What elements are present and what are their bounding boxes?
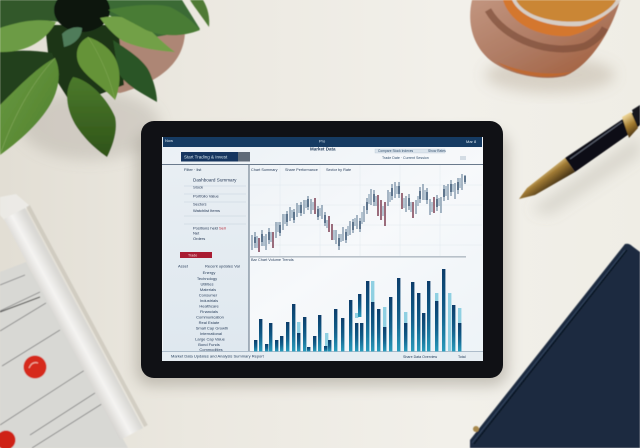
stock list: Technology — [197, 276, 217, 281]
panel: sidebar — [163, 165, 250, 352]
stock list: Asset — [178, 264, 189, 268]
panel: sidebar: Orders — [193, 236, 205, 241]
red button — [180, 252, 212, 258]
screen — [162, 137, 483, 361]
status bar: Total — [458, 355, 466, 359]
divider — [250, 256, 466, 258]
top navigation bar: Pro — [319, 138, 326, 144]
stock list: Energy — [203, 270, 215, 275]
candle bodies — [255, 176, 465, 246]
header title and controls: Compare Stock Indexes — [378, 149, 414, 153]
bar chart — [251, 258, 461, 352]
stock list: Healthcare — [199, 304, 219, 308]
panel: sidebar: Net — [193, 230, 200, 236]
red button: Trade — [188, 254, 197, 258]
stock list: Real Estate — [199, 320, 220, 325]
top navigation bar: Now — [165, 138, 173, 143]
stock list: Utilities — [201, 282, 213, 286]
red pin lower — [0, 430, 16, 448]
panel: sidebar: Filter · list — [184, 167, 202, 172]
icon: navy notebook — [470, 244, 640, 448]
bar chart: Bar Chart Volume Trends — [251, 258, 294, 262]
icon: coffee jar — [470, 0, 621, 93]
marker pen — [4, 208, 143, 440]
tablet — [136, 121, 508, 386]
panel: sidebar: Positions held Sell — [193, 226, 226, 230]
dark bars — [254, 269, 461, 352]
header search box — [181, 152, 250, 162]
line chart: candlesticks: Sector by Rate — [326, 168, 351, 172]
stock list: Val — [234, 264, 240, 268]
panel: sidebar: Portfolio Value — [193, 194, 219, 198]
stock list: Commodities — [199, 347, 223, 352]
line chart: candlesticks: Chart Summary — [251, 168, 278, 172]
stock list: Financials — [200, 309, 218, 314]
header title and controls: Market Data — [310, 146, 336, 152]
panel: sidebar: Stock — [193, 184, 203, 190]
line chart: candlesticks — [250, 165, 482, 256]
stock list: Small Cap Growth — [196, 326, 228, 330]
candle wicks — [252, 174, 465, 250]
red pin — [24, 356, 46, 378]
stock list: Large Cap Value — [195, 336, 226, 342]
icon: fountain pen — [519, 105, 640, 215]
intermediate wicks — [257, 178, 460, 248]
stock list: Materials — [200, 287, 216, 292]
status bar — [162, 351, 483, 361]
stock list: Industrials — [200, 298, 218, 303]
top navigation bar: Mar 8 — [466, 139, 477, 144]
status bar: Market Data Updates and Analysis Summary Report — [171, 354, 265, 358]
stock list: Consumer — [199, 292, 218, 298]
icon: notepaper with marker and red pins — [0, 194, 146, 448]
stock list: Bond Funds — [198, 342, 220, 347]
header title and controls — [310, 146, 466, 160]
light bars — [297, 281, 461, 351]
panel: sidebar: Dashboard Summary — [193, 178, 237, 182]
top navigation bar — [163, 137, 482, 147]
stock list — [178, 264, 240, 352]
panel: sidebar: Sectors — [193, 202, 207, 206]
line chart: candlesticks: Share Performance — [285, 168, 318, 172]
stock list: International — [200, 331, 222, 336]
status bar: Share Data Overview — [403, 355, 438, 359]
panel: sidebar: Watchlist Items — [193, 208, 220, 213]
header search box: Start Trading & Invest — [184, 154, 228, 160]
header title and controls: Show Rates — [428, 149, 446, 153]
header title and controls: Trade Date · Current Session — [382, 156, 429, 160]
icon: potted plant — [0, 0, 209, 160]
stock list: Communication — [196, 314, 224, 320]
stock list: Recent updates — [205, 264, 233, 268]
red candles — [259, 193, 434, 252]
